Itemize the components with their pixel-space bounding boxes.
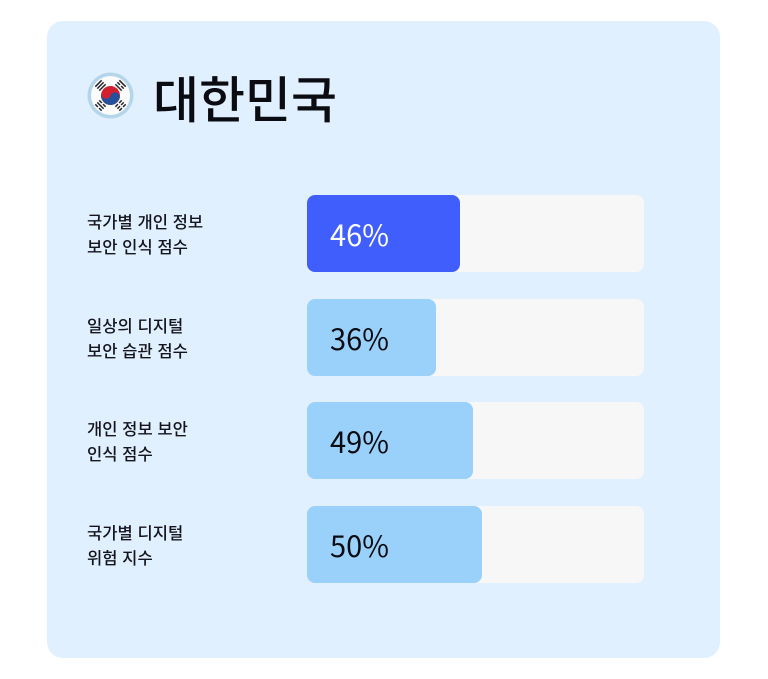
row 2 label: 일상의 디지털 xyxy=(87,313,183,337)
row 3 label xyxy=(87,416,188,465)
row 4 label: 국가별 디지털 xyxy=(87,520,183,544)
row 1 bar: 46% xyxy=(307,195,644,272)
row 3 bar: 49% xyxy=(307,402,644,478)
row 1 label xyxy=(87,209,203,258)
row 2 bar: 36%: 36% xyxy=(330,317,389,359)
row 4 bar: 50% xyxy=(307,506,644,582)
row 3 label: 개인 정보 보안 xyxy=(87,416,188,440)
row 1 bar: 46%: 46% xyxy=(330,213,389,255)
title: 대한민국 xyxy=(153,61,337,133)
row 2 label: 보안 습관 점수 xyxy=(87,338,188,362)
icon: South Korean flag xyxy=(88,72,134,118)
row 4 label: 위험 지수 xyxy=(87,545,153,569)
row 2 label xyxy=(87,313,188,362)
row 4 bar: 50%: 50% xyxy=(330,524,389,566)
row 1 label: 보안 인식 점수 xyxy=(87,234,188,258)
row 1 label: 국가별 개인 정보 xyxy=(87,209,203,233)
row 4 label xyxy=(87,520,183,569)
row 3 bar: 49%: 49% xyxy=(330,420,389,462)
row 2 bar: 36% xyxy=(307,299,644,376)
row 3 label: 인식 점수 xyxy=(87,441,153,465)
